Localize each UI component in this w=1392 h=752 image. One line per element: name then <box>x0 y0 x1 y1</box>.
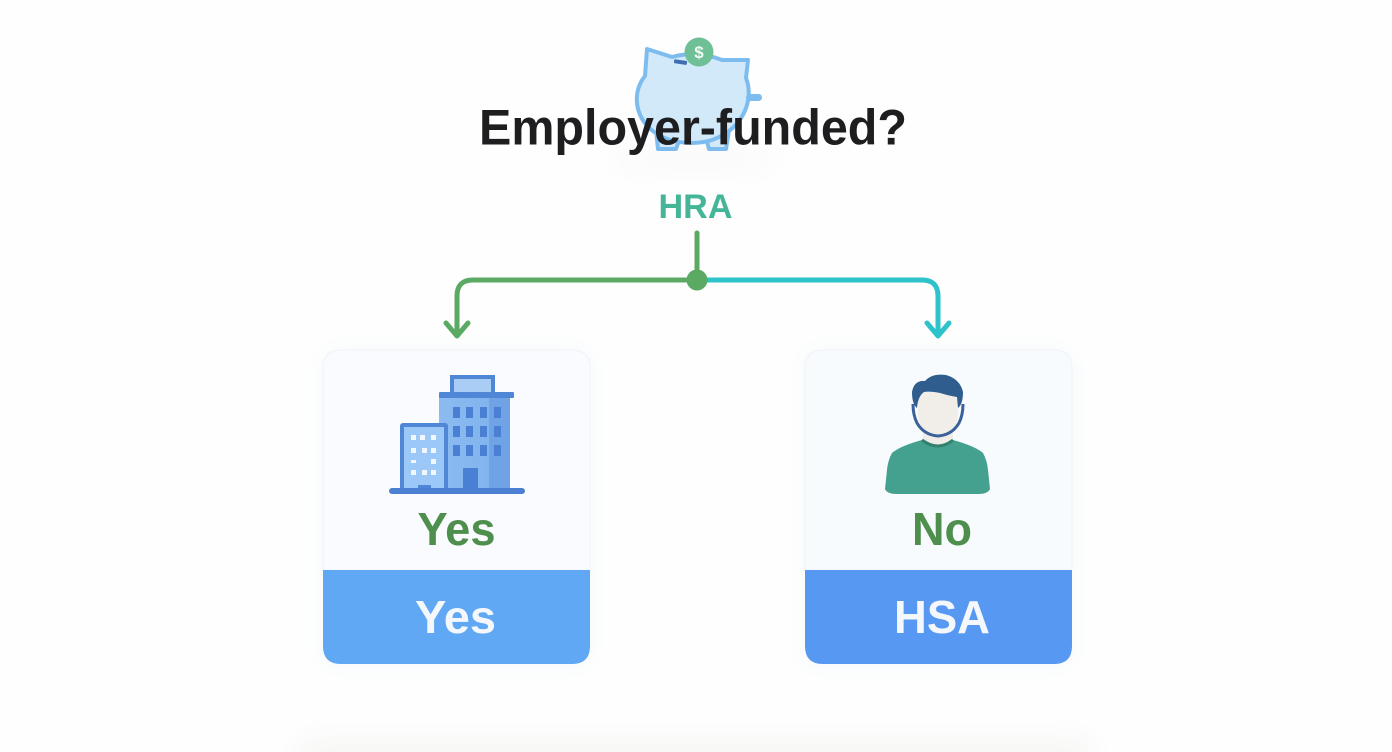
decision connector <box>446 233 949 336</box>
hair <box>912 375 963 408</box>
icon: office buildings <box>389 377 525 494</box>
card body <box>323 350 590 570</box>
beard line <box>913 404 963 436</box>
coin: $ <box>694 43 704 62</box>
footer band: hsa: HSA <box>894 591 990 643</box>
card body <box>805 350 1072 570</box>
label: HRA: HRA <box>658 188 732 226</box>
collar <box>922 440 953 446</box>
panel: no <box>805 350 1072 664</box>
footer band: hsa <box>805 570 1072 664</box>
shirt <box>885 440 990 494</box>
footer band: yes: Yes <box>415 591 496 643</box>
piggy legs <box>656 130 729 149</box>
icon: person <box>885 375 990 494</box>
arrow: no branch <box>697 280 949 336</box>
icon: piggy bank <box>637 38 762 149</box>
label: yes: Yes <box>418 503 496 555</box>
piggy tail <box>746 94 762 101</box>
piggy body with ears <box>637 49 749 143</box>
footer band: yes <box>323 570 590 664</box>
coin slot <box>674 59 687 65</box>
stem <box>694 233 700 280</box>
panel: yes <box>323 350 590 664</box>
face <box>918 392 958 435</box>
neck <box>923 428 953 446</box>
junction dot <box>686 270 708 290</box>
label: no: No <box>912 503 972 555</box>
title: Employer-funded? <box>479 100 907 156</box>
arrow: yes branch <box>446 280 697 336</box>
